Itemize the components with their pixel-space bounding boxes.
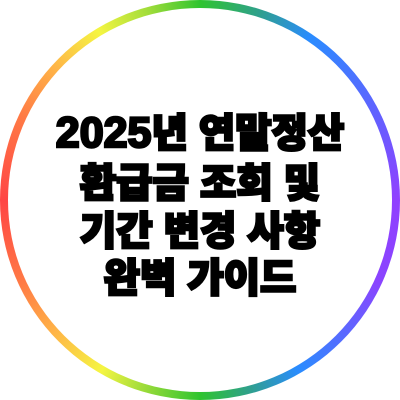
title: 환급금 조회 및 [80,152,320,209]
title: 완벽 가이드 [104,247,296,304]
title [56,102,344,304]
title: 기간 변경 사항 [80,200,320,257]
title: 2025년 연말정산 [56,102,344,159]
